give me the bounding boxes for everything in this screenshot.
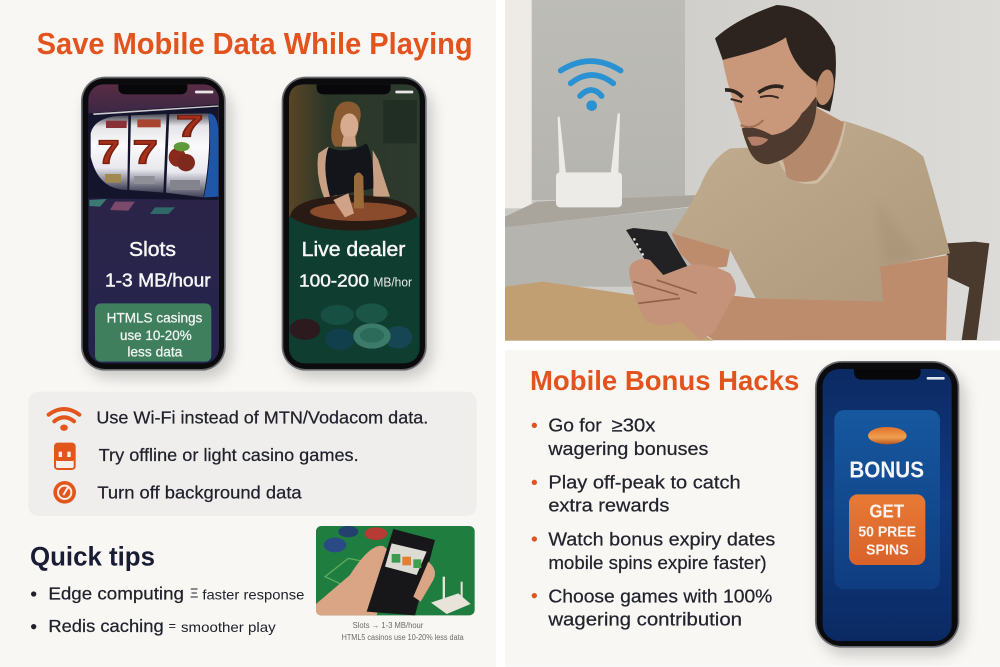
quick tip: edge computing	[31, 583, 305, 603]
phone: bonus	[815, 361, 964, 654]
heading: quick tips: Quick tips	[30, 542, 155, 572]
icon: game device	[55, 444, 75, 469]
free spins button: GET	[869, 501, 905, 522]
bullet: wagering: Go for	[548, 415, 602, 436]
quick tip: redis caching: =	[169, 619, 176, 633]
bullet: expiry dates	[532, 528, 775, 573]
panel: mobile bonus hacks	[505, 350, 1000, 667]
coin	[868, 427, 907, 444]
man	[672, 5, 950, 340]
phone: live dealer	[282, 77, 432, 377]
bullet: wagering: ≥30x	[612, 415, 656, 436]
bullet: contribution	[532, 585, 772, 630]
image: hand holding phone on casino table	[316, 526, 475, 615]
slot machine reels	[88, 104, 218, 214]
label: live dealer: Live dealer	[302, 239, 406, 261]
callout: html5 casinos: less data	[127, 344, 183, 360]
notch	[118, 84, 187, 94]
tip text: wifi: Use Wi-Fi instead of MTN/Vodacom data.	[96, 407, 428, 427]
caption: html5 casinos: HTML5 casinos use 10-20% less data	[342, 633, 464, 642]
quick tip: edge computing: faster response	[202, 586, 305, 602]
title: save mobile data: Save Mobile Data While Playing	[37, 27, 473, 61]
bonus card	[834, 410, 940, 589]
bullet: contribution: wagering contribution	[547, 609, 742, 630]
notch	[854, 369, 921, 380]
notch	[317, 84, 391, 94]
panel: left background	[0, 0, 496, 667]
icon: background data timer	[53, 481, 76, 504]
bullet: contribution: Choose games with 100%	[548, 585, 772, 606]
photo: man using phone beside wifi router	[505, 0, 1000, 341]
quick tip: edge computing: Edge computing	[48, 583, 184, 603]
bullet: off-peak	[532, 472, 741, 516]
quick tip: redis caching: Redis caching	[48, 616, 164, 636]
data rate: live dealer: 100-200	[299, 271, 369, 291]
data unit: live dealer: MB/hor	[373, 276, 412, 290]
bullet: off-peak: extra rewards	[548, 495, 669, 516]
chair	[947, 242, 989, 340]
label: slots: Slots	[129, 239, 176, 261]
slot machine reels: 7	[133, 134, 158, 171]
quick tip: redis caching: smoother play	[181, 619, 276, 635]
bullet: expiry dates: Watch bonus expiry dates	[548, 528, 775, 549]
slot machine reels: 7	[98, 134, 120, 171]
table	[505, 282, 713, 341]
bonus label: BONUS	[849, 457, 924, 483]
free spins button: SPINS	[866, 542, 909, 558]
bullet: wagering: wagering bonuses	[547, 438, 708, 459]
wifi router	[556, 113, 622, 207]
man's phone	[626, 228, 697, 293]
heading: mobile bonus hacks: Mobile Bonus Hacks	[530, 365, 799, 396]
quick tip: redis caching	[31, 616, 276, 636]
hands	[629, 259, 736, 340]
panel: tips list and quick tips	[28, 392, 477, 642]
room background	[505, 0, 1000, 341]
panel: data saving tips	[28, 392, 477, 516]
callout: html5 casinos	[95, 303, 211, 362]
casino chips	[290, 303, 412, 350]
icon: wifi	[49, 409, 79, 430]
tip text: background data: Turn off background data	[97, 482, 302, 502]
phone: slots	[81, 77, 231, 377]
bullet: off-peak: Play off-peak to catch	[548, 472, 741, 493]
caption: slots data: Slots → 1-3 MB/hour	[353, 621, 424, 630]
free spins button: 50 PREE	[858, 525, 916, 541]
dealer scene	[289, 84, 420, 231]
tip text: offline games: Try offline or light casino games.	[99, 445, 359, 465]
callout: html5 casinos: use 10-20%	[120, 327, 192, 343]
icon: wifi signal	[561, 61, 621, 111]
quick tip: edge computing: Ξ	[190, 586, 198, 600]
free spins button	[849, 494, 925, 565]
panel: save mobile data	[37, 27, 473, 377]
bullet: wagering	[532, 415, 708, 459]
bullet: expiry dates: mobile spins expire faster)	[548, 552, 767, 573]
callout: html5 casinos: HTMLS casings	[107, 310, 202, 326]
slot machine reels: 7	[176, 110, 203, 144]
data rate: slots: 1-3 MB/hour	[105, 270, 211, 291]
